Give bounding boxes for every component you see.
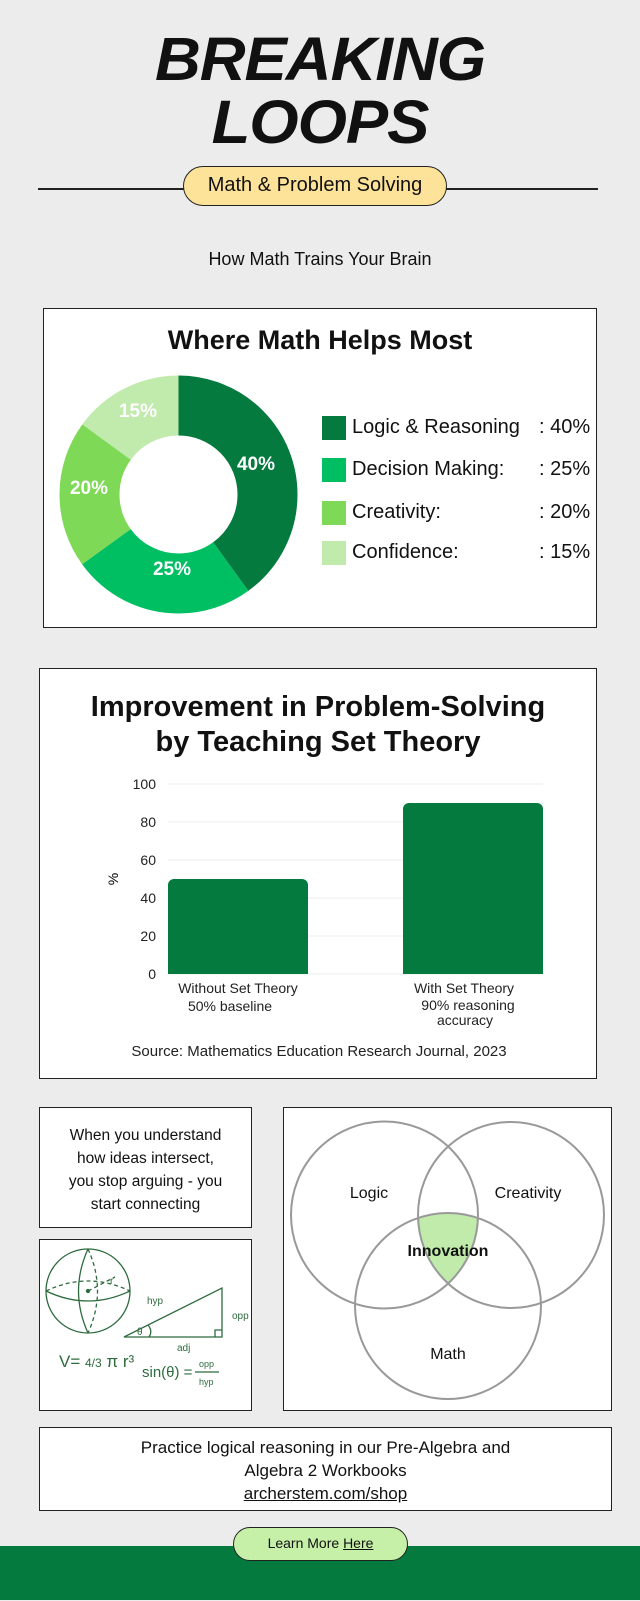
divider line	[38, 188, 598, 190]
call to action box: archerstem.com/shop	[244, 1484, 407, 1503]
donut chart: 40%	[237, 454, 275, 475]
quote box: start connecting	[91, 1196, 200, 1213]
legend: : 20%	[539, 501, 590, 523]
legend: : 25%	[539, 458, 590, 480]
heading	[91, 691, 545, 758]
icon: math sketch: hyp	[147, 1296, 164, 1307]
panel: bar chart	[39, 668, 597, 1079]
icon: math sketch: adj	[177, 1343, 190, 1354]
icon: math sketch: hyp	[199, 1377, 214, 1387]
subtitle pill	[183, 166, 447, 206]
bar chart: Without Set Theory	[178, 980, 298, 996]
icon: math sketch: V= 4/3 π r³	[59, 1352, 135, 1371]
quote box	[39, 1107, 252, 1228]
title	[155, 25, 485, 156]
bar chart: 90% reasoning	[421, 997, 515, 1013]
sketch box	[39, 1239, 252, 1411]
icon: math sketch: θ	[137, 1327, 143, 1338]
panel: venn diagram: Logic	[350, 1185, 388, 1202]
icon: math sketch: sin(θ) =	[142, 1364, 193, 1381]
panel: venn diagram	[283, 1107, 612, 1411]
call to action box: Algebra 2 Workbooks	[244, 1461, 407, 1480]
panel: venn diagram: Creativity	[495, 1185, 561, 1202]
legend: : 40%	[539, 416, 590, 438]
panel: venn diagram: Innovation	[408, 1243, 488, 1260]
panel: venn diagram: Math	[430, 1346, 466, 1363]
donut chart: 25%	[153, 559, 191, 580]
bar chart: 50% baseline	[188, 998, 272, 1014]
title: LOOPS	[212, 88, 428, 156]
donut chart: 15%	[119, 401, 157, 422]
bar chart: 40	[140, 890, 156, 906]
legend	[322, 416, 590, 565]
footer bar	[0, 1546, 640, 1600]
legend: : 15%	[539, 541, 590, 563]
button: Learn More Here	[268, 1535, 373, 1551]
bar chart: 60	[140, 852, 156, 868]
legend: Logic & Reasoning	[352, 416, 520, 438]
legend: Creativity:	[352, 501, 441, 523]
icon: math sketch: opp	[199, 1359, 214, 1369]
bar chart: %	[105, 873, 121, 885]
tagline: How Math Trains Your Brain	[208, 249, 432, 269]
quote box: When you understand	[70, 1127, 221, 1144]
bar chart	[105, 776, 543, 1060]
heading: Improvement in Problem-Solving	[91, 691, 545, 723]
subtitle pill: Math & Problem Solving	[208, 174, 422, 196]
panel: where math helps most	[43, 308, 597, 628]
donut chart	[60, 376, 298, 614]
button	[233, 1527, 408, 1561]
call to action box: Practice logical reasoning in our Pre-Algebra and	[141, 1438, 510, 1457]
innovation overlap	[419, 1214, 477, 1282]
bar chart: Source: Mathematics Education Research Journal, 2023	[131, 1043, 507, 1060]
heading: by Teaching Set Theory	[156, 726, 480, 758]
bar chart: 100	[133, 776, 156, 792]
bar chart: accuracy	[437, 1012, 493, 1028]
title: BREAKING	[155, 25, 485, 93]
legend: Decision Making:	[352, 458, 504, 480]
icon: math sketch: opp	[232, 1311, 249, 1322]
bar chart: 20	[140, 928, 156, 944]
donut chart: 20%	[70, 478, 108, 499]
icon: math sketch	[45, 1248, 249, 1387]
bar chart: 80	[140, 814, 156, 830]
bar chart: 0	[148, 966, 156, 982]
bar chart: With Set Theory	[414, 980, 514, 996]
heading: Where Math Helps Most	[168, 325, 472, 355]
legend: Confidence:	[352, 541, 459, 563]
icon: math sketch: r	[110, 1276, 114, 1287]
quote box: you stop arguing - you	[69, 1173, 222, 1190]
quote box: how ideas intersect,	[77, 1150, 214, 1167]
call to action box	[39, 1427, 612, 1511]
